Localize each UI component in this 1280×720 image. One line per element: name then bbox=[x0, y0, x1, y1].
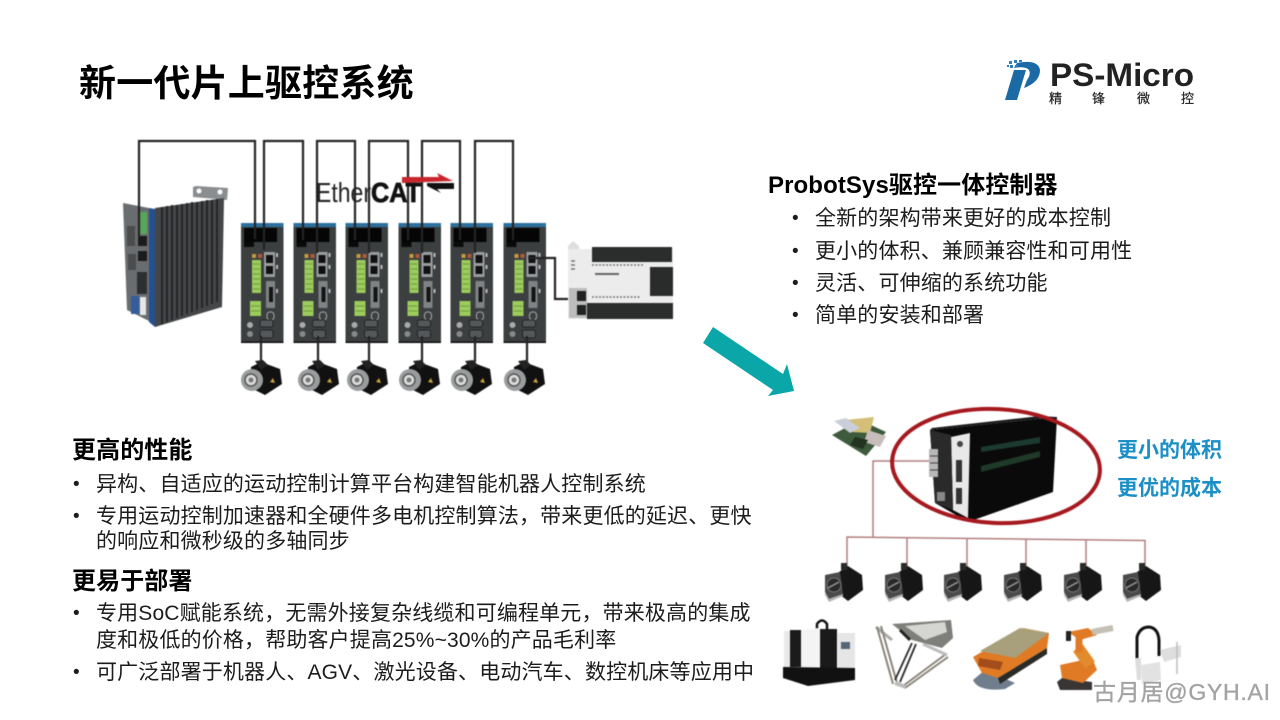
bullet: two lines: 的响应和微秒级的多轴同步 bbox=[96, 530, 350, 553]
servo motors row bbox=[241, 360, 545, 395]
plc module bbox=[568, 241, 673, 319]
panel: probotsys features bbox=[768, 172, 1132, 327]
callout: better cost: 更优的成本 bbox=[1117, 477, 1222, 500]
ethercat wires bbox=[139, 141, 575, 362]
ethercat network diagram bbox=[123, 141, 673, 395]
panel: benefits bbox=[72, 437, 754, 684]
heading: probotsys: ProbotSys驱控一体控制器 bbox=[768, 172, 1058, 199]
bullet: 可广泛部署于机器人、AGV、激光设备、电动汽车、数控机床等应用中 bbox=[96, 661, 754, 684]
title: 新一代片上驱控系统 bbox=[79, 63, 414, 104]
bullet: two lines: 度和极低的价格，帮助客户提高25%~30%的产品毛利率 bbox=[96, 629, 616, 652]
bullet: two lines bbox=[96, 600, 751, 654]
bullet: 简单的安装和部署 bbox=[815, 304, 984, 327]
ethercat logo: Ether bbox=[316, 177, 371, 208]
servo drivers bbox=[241, 223, 546, 343]
scara robot bbox=[1135, 627, 1181, 684]
agv cart bbox=[973, 628, 1049, 690]
red ellipse highlight bbox=[889, 404, 1103, 528]
callout: smaller size: 更小的体积 bbox=[1117, 439, 1222, 462]
industrial controller bbox=[123, 186, 228, 327]
watermark: 古月居@GYH.AI bbox=[1093, 679, 1270, 705]
heading: higher performance: 更高的性能 bbox=[72, 437, 192, 464]
connection lines bbox=[847, 461, 1145, 568]
heading: easier deployment: 更易于部署 bbox=[72, 568, 192, 595]
bullet: two lines: 专用运动控制加速器和全硬件多电机控制算法，带来更低的延迟、更快 bbox=[96, 505, 752, 528]
ethercat logo bbox=[316, 173, 454, 208]
logo wordmark: PS-Micro bbox=[1050, 57, 1194, 93]
logo icon bbox=[1005, 60, 1040, 100]
servo motors row bbox=[825, 563, 1161, 602]
cnc machine bbox=[783, 620, 855, 686]
bullet: two lines bbox=[96, 504, 752, 554]
logo chinese name: 精锋微控 bbox=[1049, 91, 1194, 106]
bullet: 全新的架构带来更好的成本控制 bbox=[815, 207, 1111, 230]
controller box bbox=[929, 416, 1057, 522]
delta robot bbox=[876, 620, 953, 688]
chip icon bbox=[832, 417, 886, 456]
ethercat logo: CAT bbox=[371, 177, 421, 208]
bullet: two lines: 专用SoC赋能系统，无需外接复杂线缆和可编程单元，带来极高的集成 bbox=[96, 602, 751, 625]
bullet: 更小的体积、兼顾兼容性和可用性 bbox=[815, 240, 1132, 263]
application icons bbox=[783, 620, 1181, 690]
bullet: 灵活、可伸缩的系统功能 bbox=[815, 272, 1048, 295]
orange industrial robot bbox=[1057, 628, 1113, 690]
bullet: 异构、自适应的运动控制计算平台构建智能机器人控制系统 bbox=[96, 473, 646, 496]
arrow: teal down-right bbox=[703, 327, 794, 396]
bottom-right system diagram bbox=[825, 404, 1161, 602]
